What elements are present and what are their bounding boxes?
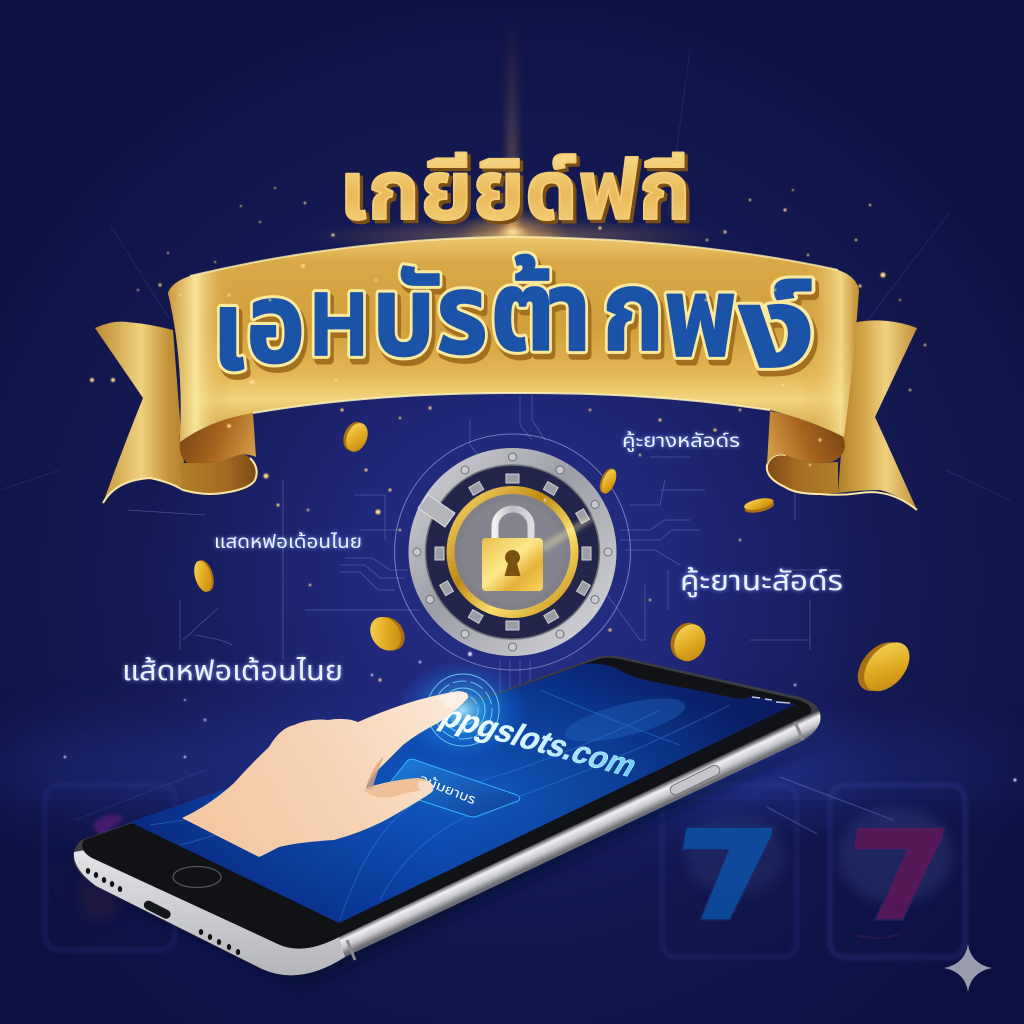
text outline: ง์ — [738, 267, 815, 391]
text depth: อ — [249, 267, 308, 391]
coin 4 — [191, 558, 217, 594]
text outline: พ — [664, 256, 737, 380]
label lower left: แส้ดหฟอเต้อนไนย — [122, 655, 343, 686]
text face: H — [310, 274, 368, 374]
text face: บั — [372, 255, 439, 379]
padlock — [482, 509, 543, 591]
blue seven — [682, 827, 773, 920]
text outline: บั — [372, 255, 439, 379]
label top right: คู้ะยางหลัอด์ร — [622, 429, 740, 453]
fingerprint rings — [427, 674, 499, 746]
text outline: อ — [246, 262, 305, 386]
antenna bands — [347, 940, 355, 960]
text face: เ — [212, 269, 246, 394]
text depth: H — [313, 279, 371, 379]
screen blob — [561, 689, 689, 751]
label middle left: แสดหฟอเด้อนไนย — [214, 530, 362, 553]
handle bar — [418, 495, 455, 527]
smartphone — [73, 656, 830, 990]
reel frame left — [45, 785, 175, 950]
text outline: ก — [602, 250, 664, 374]
rivets — [413, 453, 612, 651]
text outline: า — [548, 250, 592, 374]
text depth: บั — [375, 260, 442, 384]
coin 6 — [665, 618, 711, 666]
vault lock — [394, 434, 630, 670]
text depth: ก — [605, 255, 667, 379]
text outline: ร — [436, 253, 488, 377]
text depth: พ — [667, 261, 740, 385]
ribbon banner — [95, 237, 917, 510]
reel frame middle — [662, 785, 797, 957]
steel ring — [408, 448, 616, 656]
gold ring — [450, 490, 574, 614]
text face: พ — [664, 256, 737, 380]
text face — [212, 250, 815, 394]
white sparkles — [64, 499, 1017, 782]
text depth: า — [551, 255, 595, 379]
status bar — [752, 697, 790, 703]
right curl — [767, 411, 917, 510]
screen glow — [130, 664, 796, 923]
light beam — [303, 20, 723, 256]
main title: เกยียิด์ฟกี — [342, 147, 694, 240]
left curl — [103, 413, 257, 503]
thin outer rings — [394, 434, 630, 670]
text outline: H — [310, 274, 368, 374]
speaker holes right — [199, 929, 240, 955]
text face: ร — [436, 253, 488, 377]
text face: ก — [602, 250, 664, 374]
text depth: ร — [439, 258, 491, 382]
text face: ง์ — [738, 267, 815, 391]
lens streak — [540, 515, 594, 552]
text outline — [212, 250, 815, 394]
main title: เกยียิด์ฟกี — [339, 144, 691, 237]
url text: ppgslots.com — [434, 698, 645, 783]
slot reels background — [45, 785, 965, 957]
screen — [130, 664, 796, 923]
coin 5 — [364, 609, 411, 658]
screen waves — [150, 690, 730, 920]
screen button: อนุ้มยาบร — [417, 771, 478, 807]
text face: า — [548, 250, 592, 374]
speaker holes left — [86, 868, 122, 892]
label middle right: คู้ะยานะสัอด์ร — [680, 565, 843, 598]
coin 7 — [849, 631, 919, 703]
text depth: ง์ — [741, 272, 818, 396]
gold particles — [90, 187, 926, 682]
left tail — [95, 322, 187, 503]
floating coins — [191, 419, 919, 703]
text depth: เ — [215, 274, 249, 399]
text depth — [215, 255, 818, 399]
screen button — [385, 759, 520, 817]
red seven — [853, 827, 945, 920]
text face: อ — [246, 262, 305, 386]
text outline: ต้ — [490, 250, 555, 374]
circuit lines — [128, 395, 840, 700]
labels — [122, 429, 843, 686]
metal body — [73, 656, 821, 975]
sparkle watermark — [944, 944, 992, 992]
banner text — [212, 250, 818, 399]
black front — [82, 658, 811, 949]
text outline: เ — [212, 269, 246, 394]
coin 2 — [597, 466, 619, 496]
bolts — [435, 474, 591, 630]
coin 1 — [339, 419, 372, 455]
touch glow — [396, 660, 528, 760]
coin 3 — [743, 496, 775, 515]
hand — [182, 691, 468, 857]
reel frame right — [830, 785, 965, 957]
home button — [173, 866, 221, 888]
text face: ต้ — [490, 250, 555, 374]
right tail — [838, 320, 917, 510]
side button — [669, 764, 721, 796]
main band — [168, 237, 859, 442]
text depth: ต้ — [493, 255, 558, 379]
charging port — [142, 899, 172, 920]
